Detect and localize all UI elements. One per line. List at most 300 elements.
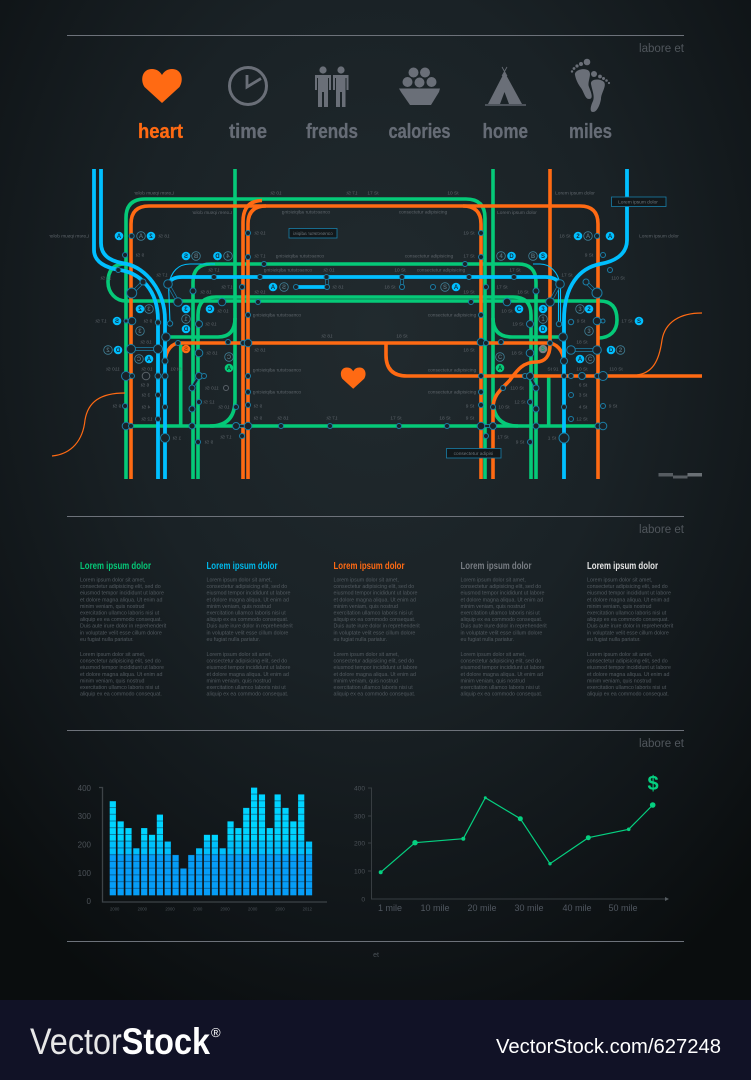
column 2: blue: et dolore magna aliqua. Ut enim ad xyxy=(206,597,289,603)
bar chart y labels: 100 xyxy=(78,869,92,878)
mirrored labels and badges: left half: A xyxy=(226,366,231,372)
orange lines xyxy=(52,169,702,479)
bar chart xyxy=(78,784,327,912)
column 5: white: Lorem ipsum dolor sit amet, xyxy=(587,652,652,658)
column 2: blue: eu fugiat nulla pariatur. xyxy=(206,637,260,643)
column 4: gray: eiusmod tempor incididunt ut labore xyxy=(460,591,544,597)
column 1: green: eiusmod tempor incididunt ut labore xyxy=(80,665,164,671)
column 2: blue: minim veniam, quis nostrud xyxy=(206,604,271,610)
station labels: right half: consectetur adipisicing xyxy=(428,312,477,318)
column 4: gray: Duis aute irure dolor in reprehenderit xyxy=(460,624,547,630)
divider rule xyxy=(67,516,684,517)
station labels: right half: 18 St xyxy=(576,340,588,346)
column 3: orange: Duis aute irure dolor in reprehenderit xyxy=(334,624,420,630)
mirrored labels and badges: left half: A xyxy=(270,285,275,291)
column 5: white: exercitation ullamco laboris nisi ut xyxy=(587,685,667,691)
column 5: white: Lorem ipsum dolor xyxy=(587,561,658,572)
column 2: blue: aliquip ex ea commodo consequat. xyxy=(206,692,288,698)
badges: right half: C xyxy=(588,357,593,363)
column 3: orange: eiusmod tempor incididunt ut labore xyxy=(334,591,417,597)
station labels: right half: 18 St xyxy=(463,348,475,354)
section label: labore et: labore et xyxy=(639,43,685,55)
column 5: white: minim veniam, quis nostrud xyxy=(587,678,652,684)
mirrored labels and badges: left half: A xyxy=(146,357,151,363)
mirrored labels and badges: left half: Lorem ipsum dolor xyxy=(192,210,232,216)
mirrored labels and badges: left half: 18 St xyxy=(332,284,344,290)
bar chart x labels xyxy=(110,906,313,912)
column 2: blue: consectetur adipisicing elit, sed do xyxy=(206,659,287,665)
mirrored labels and badges: left half: 17 St xyxy=(326,416,338,422)
station labels: right half: 12 St xyxy=(514,400,526,406)
station labels: right half: 9 St xyxy=(577,318,586,324)
column 1: green: aliquip ex ea commodo consequat. xyxy=(80,692,162,698)
mirrored labels and badges: left half: 18 St xyxy=(321,334,333,340)
badges: right half: A xyxy=(454,285,459,291)
line chart axes xyxy=(368,788,669,901)
column 3: orange: minim veniam, quis nostrud xyxy=(334,678,398,684)
mirrored labels and badges: left half: St 91 xyxy=(170,366,182,372)
column 3: orange: minim veniam, quis nostrud xyxy=(334,604,398,610)
station labels: right half: 110 St xyxy=(510,386,524,392)
column 5: white: eu fugiat nulla pariatur. xyxy=(587,637,641,643)
mirrored labels and badges: left half: consectetur adipisicing xyxy=(252,368,301,374)
station labels: right half: consectetur adipisicing xyxy=(417,268,466,274)
bar chart x labels: 2000 xyxy=(138,906,148,912)
column 1: green: Lorem ipsum dolor xyxy=(80,561,151,572)
stations xyxy=(116,230,613,444)
mirrored labels and badges: left half: 9 St xyxy=(253,404,262,410)
column 4: gray xyxy=(460,561,547,698)
column 4: gray: aliquip ex ea commodo consequat. xyxy=(460,617,542,623)
column 4: gray: Lorem ipsum dolor sit amet, xyxy=(460,578,526,584)
bar chart y labels: 200 xyxy=(78,840,92,850)
mirrored labels and badges: left half: 18 St xyxy=(140,340,152,346)
image id: VectorStock.com/627248 xyxy=(496,1036,721,1058)
column 3: orange: et dolore magna aliqua. Ut enim ad xyxy=(334,672,416,678)
column 2: blue: Lorem ipsum dolor sit amet, xyxy=(206,652,272,658)
column 5: white xyxy=(587,561,674,698)
icon: tent xyxy=(485,67,526,105)
column 3: orange: eu fugiat nulla pariatur. xyxy=(334,637,387,643)
bar chart y labels xyxy=(78,784,92,906)
station labels: right half: 17 St xyxy=(496,284,508,290)
mirrored labels and badges: left half: 3 xyxy=(184,307,188,313)
station labels: right half: consectetur adipisicing xyxy=(428,390,477,396)
mirrored labels and badges: left half: D xyxy=(115,348,120,354)
column 4: gray: eiusmod tempor incididunt ut labore xyxy=(460,665,544,671)
mirrored labels and badges: left half: 10 St xyxy=(218,404,230,410)
column 4: gray: consectetur adipisicing elit, sed do xyxy=(460,659,541,665)
line chart x labels: 50 mile xyxy=(608,903,638,913)
column 3: orange xyxy=(334,561,420,698)
blue lines xyxy=(94,169,627,479)
mirrored labels and badges: left half: S xyxy=(282,285,286,291)
line chart x labels: 20 mile xyxy=(467,903,497,913)
column 1: green: Duis aute irure dolor in reprehenderit xyxy=(80,624,167,630)
badges: right half: 3 xyxy=(541,307,545,313)
mirrored labels and badges: left half: 4 xyxy=(226,254,230,260)
mirrored labels and badges: left half: 17 St xyxy=(95,318,107,324)
station labels: right half: 10 St xyxy=(501,308,513,314)
header rule xyxy=(67,35,684,36)
mirrored labels and badges: left half: 9 St xyxy=(204,440,213,446)
station labels: right half: consectetur adipisicing xyxy=(428,368,477,374)
mirrored labels and badges: left half: 18 St xyxy=(254,348,266,354)
column 1: green: eiusmod tempor incididunt ut labore xyxy=(80,591,164,597)
mirrored labels and badges: left half: consectetur adipisicing xyxy=(252,312,301,318)
station labels: right half: 17 St xyxy=(509,268,521,274)
mirrored labels and badges: left half: 18 St xyxy=(158,234,170,240)
mirrored labels and badges: left half: 17 St xyxy=(346,190,358,196)
mirrored labels and badges: left half: 17 St xyxy=(220,434,232,440)
callout: top right box: Lorem ipsum dolor xyxy=(618,200,658,206)
mirrored labels and badges: left half: 10 St xyxy=(141,366,153,372)
station labels: right half: 18 St xyxy=(511,350,523,356)
nav label: heart: heart xyxy=(138,120,183,143)
column 1: green xyxy=(80,561,167,698)
icon: people xyxy=(315,66,348,107)
column 4: gray: eu fugiat nulla pariatur. xyxy=(460,637,514,643)
station labels: right half: 12 St xyxy=(576,416,588,422)
column 5: white: aliquip ex ea commodo consequat. xyxy=(587,692,669,698)
column 4: gray: minim veniam, quis nostrud xyxy=(460,678,525,684)
station labels: right half: 6 St xyxy=(579,382,588,388)
column 1: green: in voluptate velit esse cillum dolore xyxy=(80,630,162,636)
badges: right half: D xyxy=(509,254,514,260)
badges: right half: S xyxy=(637,319,641,325)
mirrored labels and badges: left half: 18 St xyxy=(277,416,289,422)
mirrored labels and badges: left half: 17 St xyxy=(208,268,220,274)
column 4: gray: exercitation ullamco laboris nisi ut xyxy=(460,685,540,691)
station labels: right half: 18 St xyxy=(384,284,396,290)
station labels: right half: 10 St xyxy=(498,404,510,410)
column 5: white: exercitation ullamco laboris nisi ut xyxy=(587,610,667,616)
badges: right half: A xyxy=(586,234,591,240)
column 2: blue: Duis aute irure dolor in reprehenderit xyxy=(206,624,293,630)
column 2: blue: Lorem ipsum dolor sit amet, xyxy=(206,578,272,584)
station labels: right half xyxy=(367,190,679,446)
column 2: blue: Lorem ipsum dolor xyxy=(206,561,278,572)
mirrored labels and badges: left half: 17 St xyxy=(254,254,266,260)
mirrored labels and badges: left half: 12 St xyxy=(141,416,153,422)
line chart y labels: 300 xyxy=(354,814,365,820)
station labels: right half: consectetur adipisicing xyxy=(405,254,454,260)
bars xyxy=(110,788,312,895)
mirrored labels and badges: left half: 19 St xyxy=(254,230,266,236)
mirrored labels and badges: left half: 110 St xyxy=(106,366,120,372)
mirrored labels and badges: left half: 9 St xyxy=(135,252,144,258)
divider rule xyxy=(67,730,684,731)
bar chart x labels: 2012 xyxy=(303,906,313,912)
column 1: green: et dolore magna aliqua. Ut enim ad xyxy=(80,672,162,678)
mirrored labels and badges: left half: 3 xyxy=(138,329,142,335)
station labels: right half: 110 St xyxy=(609,366,623,372)
station labels: right half: 17 St xyxy=(390,416,402,422)
mirrored labels and badges: left half xyxy=(49,190,358,446)
column 4: gray: et dolore magna aliqua. Ut enim ad xyxy=(460,597,543,603)
icon row xyxy=(138,59,612,143)
callout: top right box xyxy=(612,197,666,206)
badges: right half: A xyxy=(608,234,613,240)
mirrored labels and badges: left half: 4 St xyxy=(141,404,150,410)
nav label: frends: frends xyxy=(306,120,358,143)
column 4: gray: exercitation ullamco laboris nisi ut xyxy=(460,610,540,616)
badges: right half: 4 xyxy=(499,254,503,260)
mirrored labels and badges: left half: 6 St xyxy=(140,382,149,388)
column 3: orange: exercitation ullamco laboris nisi ut xyxy=(334,610,413,616)
station labels: right half: 110 St xyxy=(611,276,625,282)
mirrored labels and badges: left half: D xyxy=(183,327,188,333)
callout: mirrored box xyxy=(289,228,337,238)
station labels: right half: 3 St xyxy=(579,392,588,398)
mirrored labels and badges: left half: C xyxy=(207,307,212,313)
bar chart x labels: 2000 xyxy=(275,906,285,912)
column 2: blue: et dolore magna aliqua. Ut enim ad xyxy=(206,672,289,678)
registered mark: ® xyxy=(211,1025,221,1040)
mirrored labels and badges: left half: 9 St xyxy=(112,404,121,410)
badges: right half xyxy=(441,232,643,372)
station labels: right half: consectetur adipisicing xyxy=(399,210,448,216)
station labels: right half: 17 St xyxy=(621,318,633,324)
column 1: green: aliquip ex ea commodo consequat. xyxy=(80,617,162,623)
column 3: orange: consectetur adipisicing elit, sed do xyxy=(334,659,414,665)
footer rule xyxy=(67,941,684,942)
column 3: orange: et dolore magna aliqua. Ut enim ad xyxy=(334,597,416,603)
station labels: right half: Lorem ipsum dolor xyxy=(497,210,537,216)
line chart x labels: 30 mile xyxy=(514,903,544,913)
section label: labore et: labore et xyxy=(639,524,685,536)
bar chart y labels: 0 xyxy=(87,897,92,906)
mirrored labels and badges: left half: 19 St xyxy=(254,290,266,296)
column 2: blue: exercitation ullamco laboris nisi ut xyxy=(206,610,286,616)
mirrored labels and badges: left half: 17 St xyxy=(221,284,233,290)
mirrored labels and badges: left half: S xyxy=(184,254,188,260)
column 3: orange: Lorem ipsum dolor sit amet, xyxy=(334,578,399,584)
station labels: right half: 19 St xyxy=(463,290,475,296)
station links xyxy=(126,277,603,426)
bar chart x labels: 2000 xyxy=(220,906,230,912)
mirrored labels and badges: left half: A xyxy=(138,234,143,240)
section label: labore et: labore et xyxy=(639,738,685,750)
mirrored labels and badges: left half: 3 xyxy=(147,307,151,313)
column 1: green: minim veniam, quis nostrud xyxy=(80,678,145,684)
nav label: calories: calories xyxy=(388,120,450,143)
icon: food bowl xyxy=(399,68,440,105)
mirrored labels and badges: left half: 3 St xyxy=(141,392,150,398)
station labels: right half: 9 St xyxy=(466,416,475,422)
bar chart x labels: 2000 xyxy=(193,906,203,912)
station labels: right half: 10 St xyxy=(394,268,406,274)
mirrored labels and badges: left half: 10 St xyxy=(217,308,229,314)
mirrored labels and badges: left half: 2 xyxy=(138,307,142,313)
badges: right half: 3 xyxy=(587,329,591,335)
watermark banner xyxy=(0,1000,751,1080)
station labels: right half: 18 St xyxy=(517,290,529,296)
station labels: right half: 4 St xyxy=(579,404,588,410)
mirrored labels and badges: left half: 10 St xyxy=(270,190,282,196)
column 5: white: minim veniam, quis nostrud xyxy=(587,604,652,610)
column 1: green: consectetur adipisicing elit, sed do xyxy=(80,584,161,590)
line chart x labels: 10 mile xyxy=(420,903,450,913)
bar chart y labels: 400 xyxy=(78,784,92,793)
column 5: white: eiusmod tempor incididunt ut labore xyxy=(587,591,671,597)
badges: right half: A xyxy=(498,366,503,372)
line chart y labels: 400 xyxy=(354,786,365,792)
column 3: orange: aliquip ex ea commodo consequat. xyxy=(334,692,415,698)
badges: right half: D xyxy=(609,348,614,354)
line chart x labels xyxy=(378,903,638,913)
column 1: green: consectetur adipisicing elit, sed do xyxy=(80,659,161,665)
station labels: right half: 17 St xyxy=(561,272,573,278)
logo: VectorStock xyxy=(30,1021,210,1062)
footer text: et xyxy=(373,952,379,959)
column 3: orange: consectetur adipisicing elit, sed do xyxy=(334,584,414,590)
mirrored labels and badges: left half: 2 xyxy=(149,234,153,240)
mirrored labels and badges: left half: 110 St xyxy=(205,386,219,392)
badges: right half: 3 xyxy=(578,307,582,313)
station labels: right half: 19 St xyxy=(512,322,524,328)
mirrored labels and badges: left half: D xyxy=(215,254,220,260)
column 1: green: Lorem ipsum dolor sit amet, xyxy=(80,578,145,584)
callout: bottom box xyxy=(446,448,501,458)
mirrored labels and badges: left half: 1 xyxy=(184,317,188,323)
icon: footprints xyxy=(571,59,610,112)
mirrored labels and badges: left half: 12 St xyxy=(203,400,215,406)
column 2: blue: in voluptate velit esse cillum dolore xyxy=(206,630,288,636)
station labels: right half: St 91 xyxy=(547,366,559,372)
column 1: green: exercitation ullamco laboris nisi ut xyxy=(80,685,160,691)
mirrored labels and badges: left half: A xyxy=(116,234,121,240)
mirrored labels and badges: left half: 9 St xyxy=(253,416,262,422)
column 1: green: minim veniam, quis nostrud xyxy=(80,604,145,610)
badges: right half: 2 xyxy=(619,348,623,354)
scale bar xyxy=(658,473,702,478)
column 3: orange: aliquip ex ea commodo consequat. xyxy=(334,617,415,623)
mirrored labels and badges: left half: consectetur adipisicing xyxy=(252,390,301,396)
column 4: gray: in voluptate velit esse cillum dolore xyxy=(460,630,542,636)
badges: right half: C xyxy=(498,355,503,361)
station labels: right half: 10 St xyxy=(447,190,459,196)
mirrored labels and badges: left half: 19 St xyxy=(205,322,217,328)
mirrored labels and badges: left half: Lorem ipsum dolor xyxy=(49,234,89,240)
column 1: green: eu fugiat nulla pariatur. xyxy=(80,637,134,643)
mirrored labels and badges: left half: consectetur adipisicing xyxy=(281,210,330,216)
column 1: green: et dolore magna aliqua. Ut enim ad xyxy=(80,597,162,603)
column 3: orange: in voluptate velit esse cillum dolore xyxy=(334,630,415,636)
column 5: white: Duis aute irure dolor in reprehenderit xyxy=(587,624,674,630)
mirrored labels and badges: left half: 2 xyxy=(106,348,110,354)
station labels: right half: Lorem ipsum dolor xyxy=(555,190,595,196)
bar chart x labels: 2000 xyxy=(110,906,120,912)
badges: right half: A xyxy=(578,357,583,363)
station labels: right half: 17 St xyxy=(463,254,475,260)
mirrored labels and badges: left half: C xyxy=(136,357,141,363)
column 1: green: exercitation ullamco laboris nisi ut xyxy=(80,610,160,616)
dollar sign: $ xyxy=(647,773,659,795)
icon: heart xyxy=(142,69,182,103)
mirrored labels and badges: left half: consectetur adipisicing xyxy=(275,254,324,260)
column 4: gray: consectetur adipisicing elit, sed do xyxy=(460,584,541,590)
station labels: right half: 19 St xyxy=(463,230,475,236)
callout: mirrored box: consectetur adipisi xyxy=(293,231,333,237)
metro map xyxy=(49,169,702,479)
green lines xyxy=(108,169,617,479)
station labels: right half: 9 St xyxy=(516,440,525,446)
line series xyxy=(379,796,656,874)
line chart y labels xyxy=(354,786,365,904)
line chart y labels: 100 xyxy=(354,868,365,876)
column 2: blue: consectetur adipisicing elit, sed do xyxy=(206,584,287,590)
station labels: right half: 1 St xyxy=(548,436,557,442)
mirrored labels and badges: left half: S xyxy=(115,319,119,325)
column 4: gray: minim veniam, quis nostrud xyxy=(460,604,525,610)
line chart x labels: 1 mile xyxy=(378,903,402,913)
column 2: blue: minim veniam, quis nostrud xyxy=(206,678,271,684)
badges: right half: 1 xyxy=(541,317,545,323)
nav label: miles: miles xyxy=(569,120,612,143)
column 4: gray: aliquip ex ea commodo consequat. xyxy=(460,692,542,698)
bar chart x labels: 2000 xyxy=(248,906,258,912)
mirrored labels and badges: left half: 1 St xyxy=(172,436,181,442)
column 4: gray: Lorem ipsum dolor sit amet, xyxy=(460,652,526,658)
column 3: orange: Lorem ipsum dolor sit amet, xyxy=(334,652,399,658)
column 4: gray: Lorem ipsum dolor xyxy=(460,561,532,572)
line chart xyxy=(354,773,669,913)
column 3: orange: exercitation ullamco laboris nisi ut xyxy=(334,685,413,691)
station labels: right half: 10 St xyxy=(576,366,588,372)
mirrored labels and badges: left half: C xyxy=(226,355,231,361)
text columns xyxy=(80,561,674,698)
column 2: blue: aliquip ex ea commodo consequat. xyxy=(206,617,288,623)
bar chart x labels: 2000 xyxy=(165,906,175,912)
callout: bottom box: consectetur adipisi xyxy=(454,451,493,457)
mirrored labels and badges: left half: 9 St xyxy=(143,318,152,324)
nav label: time: time xyxy=(229,120,267,143)
icon: center heart xyxy=(341,368,366,389)
badges: right half: S xyxy=(443,285,447,291)
station labels: right half: 17 St xyxy=(497,434,509,440)
badges: right half: S xyxy=(541,254,545,260)
nav label: home: home xyxy=(482,120,528,143)
badges: right half: B xyxy=(531,254,536,260)
station labels: right half: 9 St xyxy=(585,252,594,258)
column 5: white: consectetur adipisicing elit, sed do xyxy=(587,584,668,590)
station labels: right half: 18 St xyxy=(396,334,408,340)
badges: right half: 2 xyxy=(587,307,591,313)
column 3: orange: Lorem ipsum dolor xyxy=(334,561,405,572)
station labels: right half: 9 St xyxy=(466,404,475,410)
mirrored labels and badges: left half: 18 St xyxy=(206,350,218,356)
line chart y labels: 0 xyxy=(361,896,365,904)
icon: clock xyxy=(230,68,266,104)
badges: right half: D xyxy=(541,327,546,333)
bar chart y labels: 300 xyxy=(78,812,92,821)
column 5: white: consectetur adipisicing elit, sed do xyxy=(587,659,668,665)
mirrored labels and badges: left half: 18 St xyxy=(200,290,212,296)
line chart x labels: 40 mile xyxy=(562,903,592,913)
column 2: blue: eiusmod tempor incididunt ut labore xyxy=(206,665,290,671)
mirrored labels and badges: left half: 10 St xyxy=(323,268,335,274)
station labels: right half: 18 St xyxy=(439,416,451,422)
column 1: green: Lorem ipsum dolor sit amet, xyxy=(80,652,145,658)
mirrored labels and badges: left half: 17 St xyxy=(156,272,168,278)
column 2: blue xyxy=(206,561,293,698)
line chart y labels: 200 xyxy=(354,840,365,848)
mirrored labels and badges: left half: B xyxy=(193,254,198,260)
column 5: white: et dolore magna aliqua. Ut enim ad xyxy=(587,597,669,603)
column 5: white: eiusmod tempor incididunt ut labore xyxy=(587,665,671,671)
badges: right half: C xyxy=(517,307,522,313)
